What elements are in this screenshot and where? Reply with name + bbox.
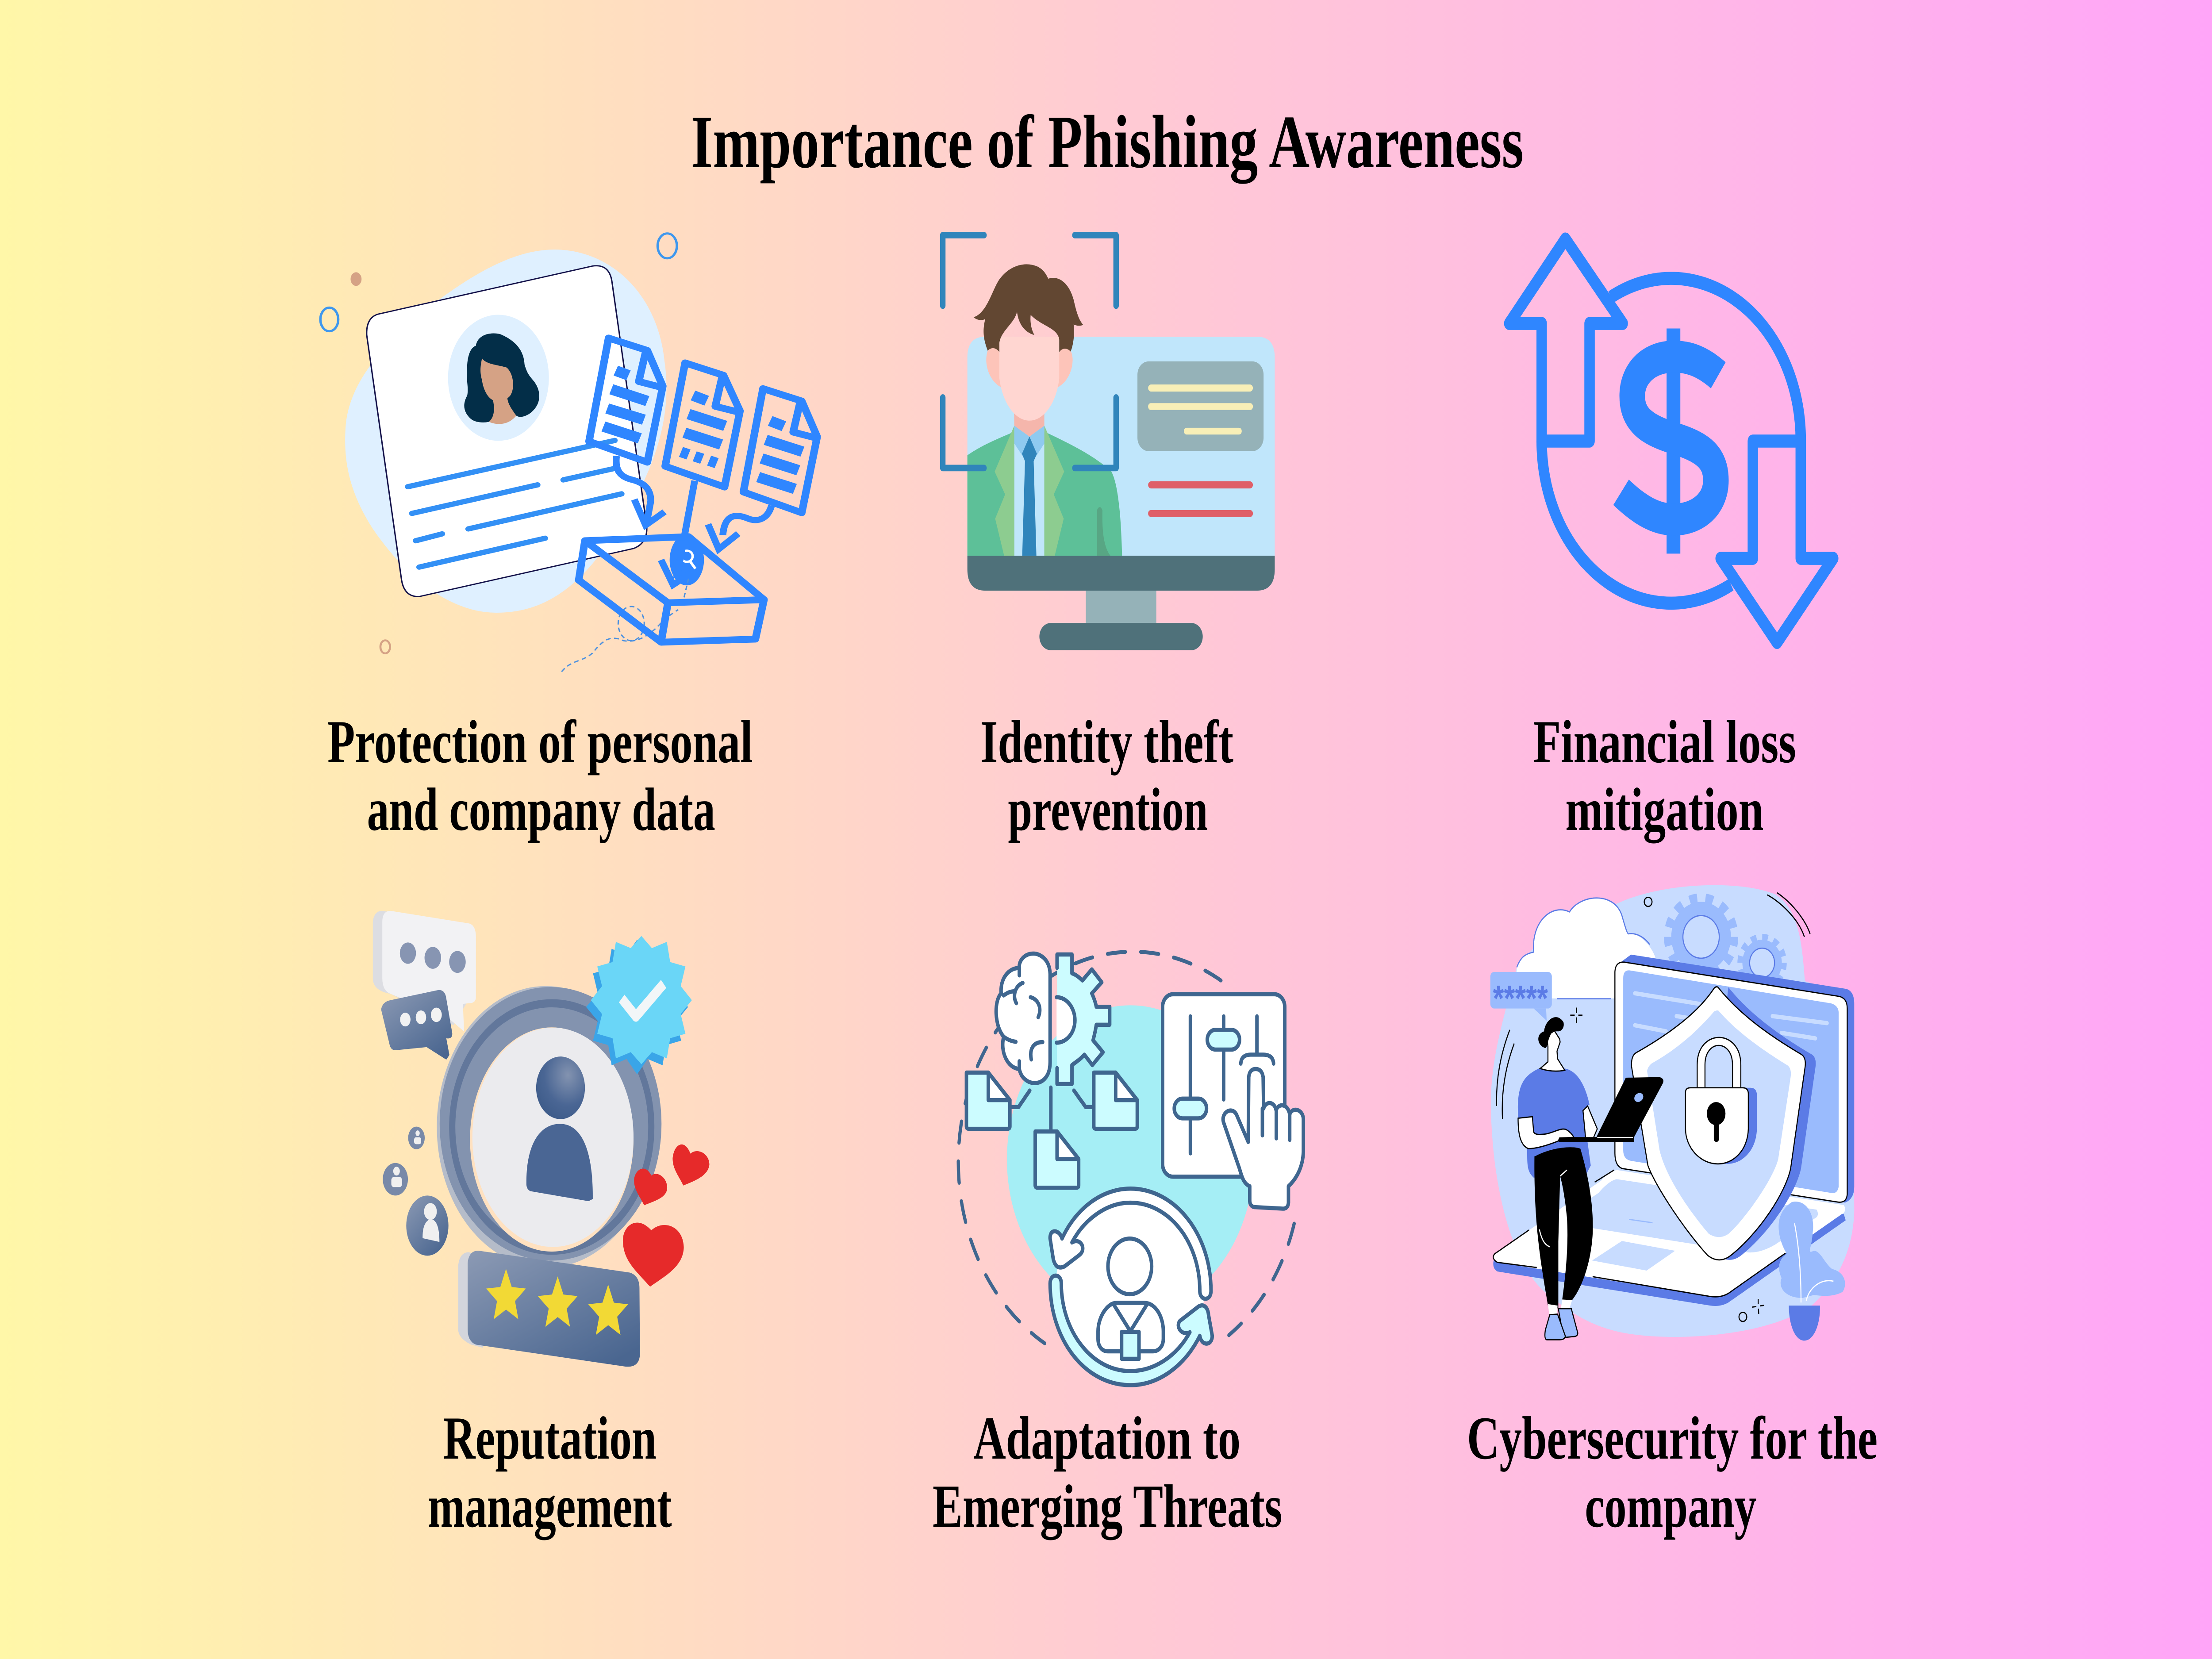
magnifier [670, 534, 704, 585]
box [579, 537, 764, 642]
padlock [1686, 1037, 1757, 1164]
up arrow [1509, 239, 1623, 441]
background blob [345, 250, 667, 613]
laptop base [1493, 1170, 1846, 1306]
down arrow [1720, 441, 1833, 642]
label: financial loss mitigation: Financial loss [1533, 708, 1796, 776]
white chat bubble [373, 911, 476, 1031]
icon: personal data card and documents [320, 234, 817, 672]
label: reputation management [428, 1405, 672, 1540]
person [968, 264, 1122, 556]
slider panel [1163, 994, 1285, 1177]
documents [967, 1072, 1137, 1188]
circular arcs [1542, 278, 1801, 603]
cycle arrows with person [1050, 1189, 1212, 1385]
laptop screen [1615, 955, 1854, 1202]
title: Importance of Phishing Awareness [691, 100, 1524, 184]
arrows into box [616, 456, 772, 585]
dark chat bubble [381, 990, 452, 1060]
password bubble: ***** [1493, 979, 1548, 1019]
dollar sign [1621, 328, 1718, 553]
label: protection of personal and company data: Protection of personal [327, 708, 753, 776]
person with laptop [1518, 1017, 1663, 1340]
label: protection of personal and company data [327, 708, 753, 844]
gears [1668, 898, 1784, 988]
documents [589, 338, 817, 513]
star rating bar [458, 1251, 640, 1367]
hearts [623, 1144, 709, 1286]
icon: identity on monitor [943, 235, 1275, 650]
profile person [526, 1056, 593, 1201]
avatar [448, 315, 549, 441]
icon: reputation badge [373, 911, 709, 1367]
profile ring [437, 986, 661, 1268]
small avatars [383, 1127, 449, 1256]
connector lines [1010, 1087, 1094, 1131]
label: adaptation to emerging threats: Emerging Threats [933, 1473, 1282, 1540]
label: identity theft prevention: Identity theft [980, 708, 1233, 776]
cyan circle [1007, 1005, 1254, 1313]
dashed orbit [958, 952, 1294, 1343]
plant [1778, 1202, 1845, 1340]
label: financial loss mitigation: mitigation [1565, 776, 1763, 844]
face scan brackets [943, 235, 1116, 468]
hand [1223, 1069, 1303, 1209]
monitor screen [968, 337, 1275, 559]
label: adaptation to emerging threats: Adaptation to [973, 1405, 1240, 1472]
verified badge [586, 936, 692, 1074]
label: identity theft prevention [980, 708, 1233, 844]
label: financial loss mitigation [1533, 708, 1796, 844]
background blob [1491, 885, 1854, 1337]
label: reputation management: Reputation [443, 1405, 657, 1472]
brain and gear [996, 953, 1110, 1084]
card text lines [408, 441, 622, 567]
label: reputation management: management [428, 1473, 672, 1540]
motion lines and sparkles [1497, 893, 1810, 1321]
monitor frame and stand [968, 556, 1275, 650]
label: cybersecurity for the company: Cybersecurity for the [1467, 1405, 1878, 1472]
label: cybersecurity for the company [1467, 1405, 1878, 1540]
dashed trail [561, 579, 688, 672]
label: identity theft prevention: prevention [1008, 776, 1208, 844]
profile card [367, 266, 647, 597]
label: adaptation to emerging threats [933, 1405, 1282, 1540]
info panel [1137, 361, 1263, 517]
label: protection of personal and company data: and company data [367, 776, 715, 844]
icon: cybersecurity laptop [1490, 885, 1854, 1340]
icon: dollar with up and down arrows [1509, 239, 1833, 642]
cloud [1516, 898, 1655, 999]
label: cybersecurity for the company: company [1585, 1473, 1756, 1540]
icon: adaptation to threats [958, 952, 1303, 1385]
decorative dots [320, 234, 677, 653]
shield [1632, 987, 1816, 1260]
